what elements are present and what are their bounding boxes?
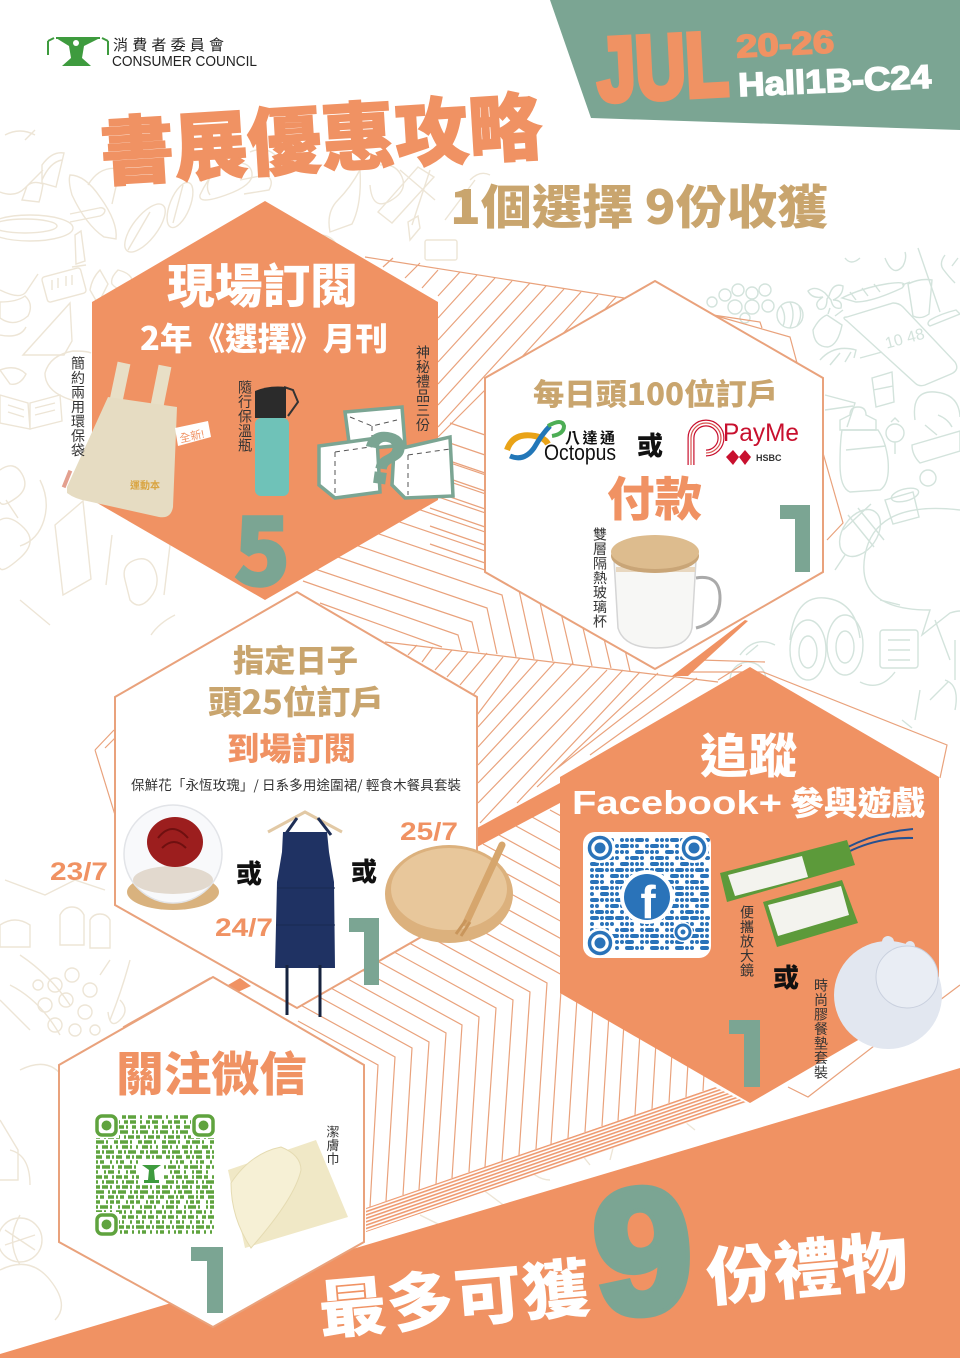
heading line 2: 頭25位訂戶 bbox=[208, 676, 384, 724]
banner text right: 份禮物 bbox=[702, 1210, 911, 1320]
heading: 關注微信 bbox=[116, 1036, 307, 1105]
date range: 20-26 bbox=[735, 23, 835, 65]
icon: magnifier bookmarks bbox=[720, 829, 913, 947]
icon: payme logo bbox=[691, 419, 799, 465]
question mark: ? bbox=[357, 416, 411, 502]
heading: 現場訂閱 bbox=[167, 248, 358, 317]
number 1 bbox=[191, 1247, 223, 1313]
label: glass mug: 雙層隔熱玻璃杯 bbox=[590, 527, 610, 628]
bag print: 運動本 bbox=[130, 479, 160, 492]
thick orange connector bands bbox=[228, 620, 748, 992]
banner text left: 最多可獲 bbox=[314, 1237, 593, 1353]
octopus chinese: 八達通 bbox=[565, 430, 615, 447]
pay label: 付款 bbox=[607, 461, 702, 530]
number 1: 1 bbox=[720, 982, 780, 1127]
or: 或 bbox=[351, 852, 377, 889]
hsbc: HSBC bbox=[756, 453, 782, 463]
chevron lines above the bottom banner bbox=[295, 810, 714, 1211]
icon: apron bbox=[268, 812, 342, 1017]
subheading: Facebook+ bbox=[572, 784, 782, 821]
background doodles: tan left bbox=[0, 130, 695, 1320]
striped background: lines between panels bbox=[95, 257, 960, 1211]
number 1 bbox=[780, 505, 810, 572]
month label: JUL bbox=[594, 15, 730, 121]
subheading bbox=[572, 777, 925, 825]
icon: octopus logo bbox=[507, 422, 616, 465]
panel: first 100 subscribers bbox=[485, 281, 831, 669]
logo chinese text: 消費者委員會 bbox=[113, 37, 224, 54]
or: 或 bbox=[773, 958, 799, 995]
heading line 3: 到場訂閱 bbox=[227, 724, 356, 770]
number 1 bbox=[349, 918, 379, 985]
heading: 每日頭100位訂戶 bbox=[533, 370, 778, 414]
label: flask: 隨行保溫瓶 bbox=[235, 380, 255, 453]
label: magnifier: 便攜放大鏡 bbox=[737, 905, 757, 978]
icon: rose dome bbox=[124, 805, 222, 910]
qr code: wechat bbox=[94, 1113, 216, 1237]
panel: on-site subscription bbox=[62, 201, 453, 612]
panel: follow facebook bbox=[560, 667, 942, 1127]
logo english text: CONSUMER COUNCIL bbox=[112, 54, 257, 70]
icon: tote bag bbox=[62, 363, 211, 517]
or: 或 bbox=[236, 854, 262, 891]
icon: washcloth bbox=[228, 1140, 348, 1248]
subheading: 參與遊戲 bbox=[790, 777, 925, 825]
icon: flask bbox=[255, 386, 298, 496]
sticker bbox=[175, 421, 211, 446]
facebook glyph: f bbox=[640, 876, 656, 928]
date 23/7: 23/7 bbox=[50, 858, 108, 886]
prize list: 保鮮花「永恆玫瑰」/ 日系多用途圍裙/ 輕食木餐具套裝 bbox=[131, 774, 462, 794]
or: 或 bbox=[637, 426, 663, 463]
icon: placemats bbox=[834, 936, 942, 1049]
panel: follow wechat bbox=[59, 977, 364, 1353]
label: washcloth: 潔膚巾 bbox=[324, 1125, 342, 1166]
sticker: 全新! bbox=[178, 427, 206, 446]
heading: 追蹤 bbox=[700, 718, 797, 787]
number 1 bbox=[729, 1020, 760, 1087]
qr code: facebook bbox=[583, 832, 711, 958]
icon: mystery boxes bbox=[319, 407, 453, 502]
bottom banner bbox=[0, 1068, 960, 1358]
number 1: 1 bbox=[770, 467, 831, 612]
icon: glass mug bbox=[611, 535, 720, 648]
banner big number: 9 bbox=[587, 1151, 699, 1353]
top right banner bbox=[550, 0, 960, 130]
date 24/7: 24/7 bbox=[215, 914, 273, 942]
payme text: PayMe bbox=[723, 419, 799, 447]
number 5: 5 bbox=[234, 479, 290, 612]
label: placemats: 時尚膠餐墊套裝 bbox=[811, 978, 831, 1080]
panel: selected days bbox=[50, 592, 513, 1025]
number 1: 1 bbox=[182, 1208, 243, 1353]
label: tote bag: 簡約兩用環保袋 bbox=[68, 356, 88, 458]
phone clock: 10 48 bbox=[883, 326, 927, 353]
number 1: 1 bbox=[339, 880, 400, 1025]
logo: consumer council bbox=[48, 37, 257, 70]
heading line 1: 指定日子 bbox=[233, 636, 358, 681]
fine hatched band bbox=[366, 1087, 747, 1232]
title: 書展優惠攻略 bbox=[97, 68, 545, 201]
octopus english: Octopus bbox=[544, 440, 616, 465]
subtitle: 1個選擇 9份收獲 bbox=[450, 169, 828, 238]
label: mystery gifts: 神秘禮品三份 bbox=[413, 345, 433, 433]
icon: wooden plate bbox=[385, 845, 513, 943]
background doodles: green right bbox=[707, 248, 960, 728]
subheading: 2年《選擇》月刊 bbox=[140, 314, 388, 360]
date 25/7: 25/7 bbox=[400, 818, 458, 846]
hall booth: Hall1B-C24 bbox=[737, 58, 933, 103]
